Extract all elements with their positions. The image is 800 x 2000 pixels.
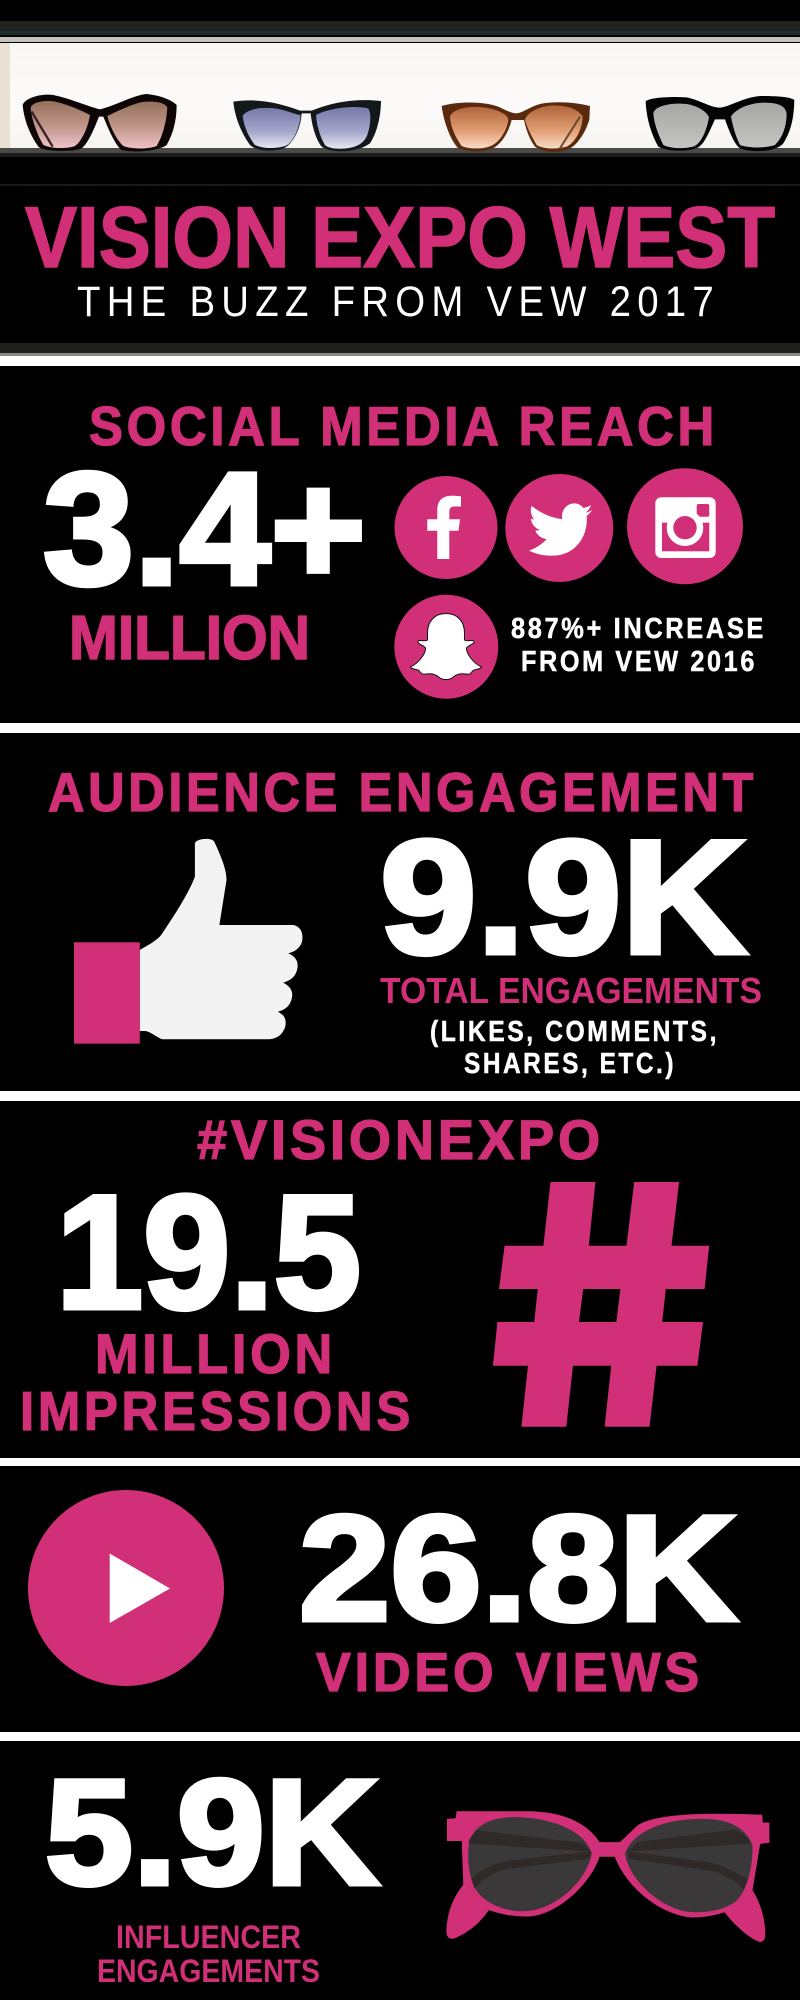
panel: influencer engagements <box>45 1748 769 1989</box>
stat: 5.9K: 5.9K <box>45 1748 379 1916</box>
icon: large hash <box>493 1182 709 1427</box>
stat: 19.5: 19.5 <box>56 1162 361 1343</box>
text: increase from vew 2016 <box>511 613 766 678</box>
stat: 3.4+: 3.4+ <box>43 439 366 618</box>
label: million impressions <box>20 1322 414 1442</box>
sunglasses 2: blue lens dark frame <box>233 100 381 151</box>
heading: audience engagement: AUDIENCE ENGAGEMENT <box>48 761 757 823</box>
label: total engagements: TOTAL ENGAGEMENTS <box>380 970 762 1011</box>
icon: thumbs up <box>74 839 302 1044</box>
divider bar <box>0 723 800 733</box>
sunglasses 4: black frame grey lens <box>646 96 794 151</box>
text: increase from vew 2016: 887%+ INCREASE <box>511 613 766 645</box>
divider bar <box>0 1091 800 1101</box>
panel: video views <box>28 1484 737 1703</box>
divider bar <box>0 356 800 366</box>
label: million impressions: MILLION <box>95 1322 336 1385</box>
icon: facebook <box>394 476 498 579</box>
text: likes comments shares: SHARES, ETC.) <box>464 1048 676 1080</box>
icon: play button <box>28 1490 224 1686</box>
stat: 9.9K: 9.9K <box>380 807 747 988</box>
panel: social media reach <box>43 395 766 699</box>
heading: social media reach: SOCIAL MEDIA REACH <box>89 395 718 457</box>
text: likes comments shares <box>430 1016 719 1080</box>
divider bar <box>0 1458 800 1466</box>
panel: audience engagement <box>48 761 762 1080</box>
text: increase from vew 2016: FROM VEW 2016 <box>521 646 757 678</box>
icon: twitter <box>505 474 613 582</box>
label: million: MILLION <box>69 604 310 673</box>
sunglasses 1: brown pink cat eye <box>23 94 177 151</box>
label: million impressions: IMPRESSIONS <box>20 1380 414 1442</box>
sunglasses 3: tortoise orange lens <box>442 102 590 152</box>
label: influencer engagements: ENGAGEMENTS <box>97 1953 320 1989</box>
label: influencer engagements: INFLUENCER <box>116 1919 301 1955</box>
subtitle: THE BUZZ FROM VEW 2017 <box>77 278 720 326</box>
label: influencer engagements <box>97 1919 320 1989</box>
icon: pink sunglasses <box>446 1811 769 1942</box>
icon: snapchat <box>394 595 498 699</box>
divider bar <box>0 1732 800 1741</box>
stat: 26.8K: 26.8K <box>299 1484 737 1652</box>
panel: hashtag impressions <box>20 1108 709 1442</box>
text: likes comments shares: (LIKES, COMMENTS, <box>430 1016 719 1048</box>
icon: instagram <box>627 468 743 584</box>
label: video views: VIDEO VIEWS <box>316 1641 703 1703</box>
heading: #visionexpo: #VISIONEXPO <box>197 1108 604 1171</box>
panel: header photo of sunglasses on shelf <box>0 21 800 356</box>
